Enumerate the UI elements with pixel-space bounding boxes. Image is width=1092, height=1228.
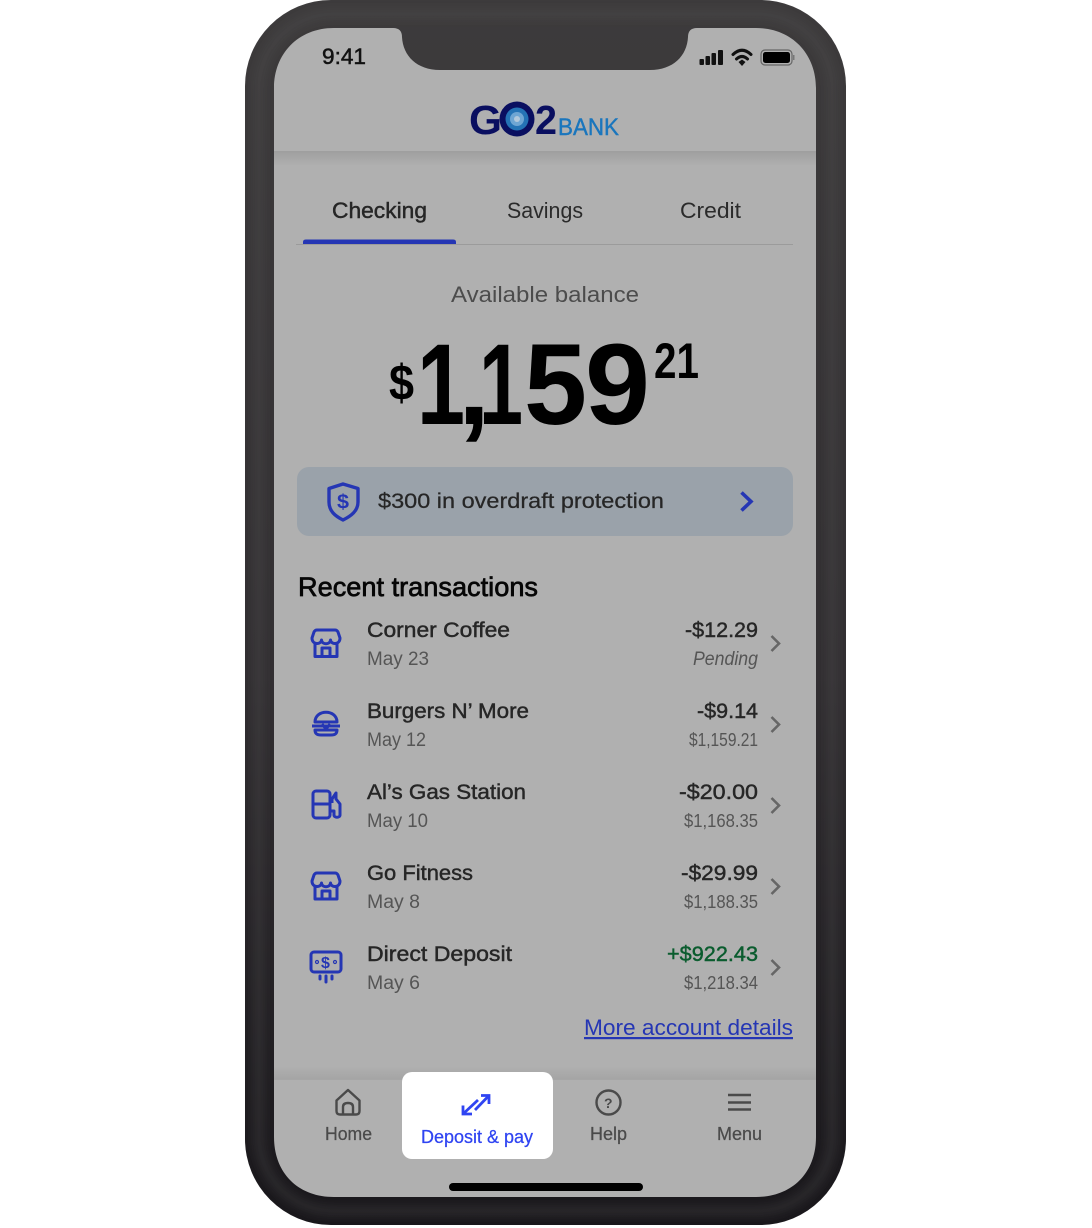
transaction: Direct Deposit <box>311 942 779 994</box>
icon: burger <box>312 712 340 735</box>
transaction: Al's Gas Station: $1,168.35 <box>684 811 758 831</box>
transaction: Al's Gas Station: -$20.00 <box>679 780 758 804</box>
transaction: Al's Gas Station: May 10 <box>367 811 428 832</box>
home indicator <box>449 1183 643 1191</box>
transaction: Go Fitness: May 8 <box>367 892 420 913</box>
overdraft banner: $300 in overdraft protection <box>378 489 664 513</box>
transaction: Al's Gas Station: Al’s Gas Station <box>367 780 526 804</box>
transaction: Corner Coffee: -$12.29 <box>685 618 758 642</box>
nav: deposit and pay (highlighted) <box>402 1072 553 1159</box>
logo: GO2 Bank: BANK <box>558 114 619 141</box>
balance amount: 21 <box>654 333 699 389</box>
nav: menu: Menu <box>717 1124 762 1144</box>
transaction: Burgers N' More: Burgers N’ More <box>367 699 529 723</box>
transaction: Burgers N' More: May 12 <box>367 730 426 751</box>
account tabs: Checking <box>332 198 427 223</box>
nav: help <box>590 1090 627 1144</box>
account tabs <box>296 198 793 245</box>
transaction: Go Fitness: Go Fitness <box>367 861 473 885</box>
icon: store <box>312 630 340 656</box>
transaction: Burgers N' More <box>312 699 779 751</box>
balance amount <box>389 321 699 449</box>
balance amount: 1 <box>479 321 523 449</box>
balance amount: , <box>458 321 490 449</box>
nav: help: Help <box>590 1124 627 1144</box>
transaction: Direct Deposit: +$922.43 <box>667 942 758 966</box>
icon: chevron <box>742 492 751 510</box>
transaction: Go Fitness: -$29.99 <box>681 861 758 885</box>
logo: GO2 Bank: G <box>469 97 502 143</box>
nav: menu <box>717 1095 762 1144</box>
nav: help: ? <box>604 1095 613 1111</box>
nav: home <box>325 1090 372 1144</box>
status icons <box>700 50 794 66</box>
logo: GO2 Bank <box>469 97 619 143</box>
transaction: Go Fitness <box>312 861 779 913</box>
account tabs: Credit <box>680 198 742 223</box>
transaction: Go Fitness: $1,188.35 <box>684 892 758 912</box>
icon: gas pump <box>313 791 340 818</box>
icon: shield <box>329 484 358 520</box>
transaction: Burgers N' More: -$9.14 <box>697 699 758 723</box>
icon: store <box>312 873 340 899</box>
transaction: Corner Coffee: Corner Coffee <box>367 618 510 642</box>
transaction: Burgers N' More: $1,159.21 <box>689 730 758 750</box>
screen <box>274 28 816 1197</box>
transaction: Direct Deposit: $1,218.34 <box>684 973 758 993</box>
icon: cash deposit: $ <box>321 955 330 972</box>
balance label: Available balance <box>451 282 639 307</box>
overdraft banner <box>297 467 793 536</box>
icon: shield: $ <box>337 492 349 514</box>
transaction: Corner Coffee <box>312 618 779 670</box>
balance amount: $ <box>389 355 414 411</box>
logo: GO2 Bank: 2 <box>535 97 557 143</box>
account tabs: Savings <box>507 198 583 223</box>
balance amount: 9 <box>585 321 650 449</box>
balance amount: 1 <box>417 321 465 449</box>
transaction: Direct Deposit: May 6 <box>367 973 420 994</box>
phone mockup <box>245 0 846 1225</box>
status bar time: 9:41 <box>322 44 366 69</box>
more account details link: More account details <box>584 1015 793 1040</box>
section heading: Recent transactions <box>298 572 538 602</box>
transaction: Corner Coffee: May 23 <box>367 649 429 670</box>
transaction: Al's Gas Station <box>313 780 779 832</box>
transaction: Corner Coffee: Pending <box>693 649 758 670</box>
icon: cash deposit <box>311 952 341 982</box>
bottom navigation <box>325 1072 762 1159</box>
nav: home: Home <box>325 1124 372 1144</box>
balance amount: 5 <box>524 321 587 449</box>
nav: deposit and pay (highlighted): Deposit & pay <box>421 1127 533 1147</box>
device frame <box>245 0 846 1225</box>
transaction: Direct Deposit: Direct Deposit <box>367 942 512 966</box>
